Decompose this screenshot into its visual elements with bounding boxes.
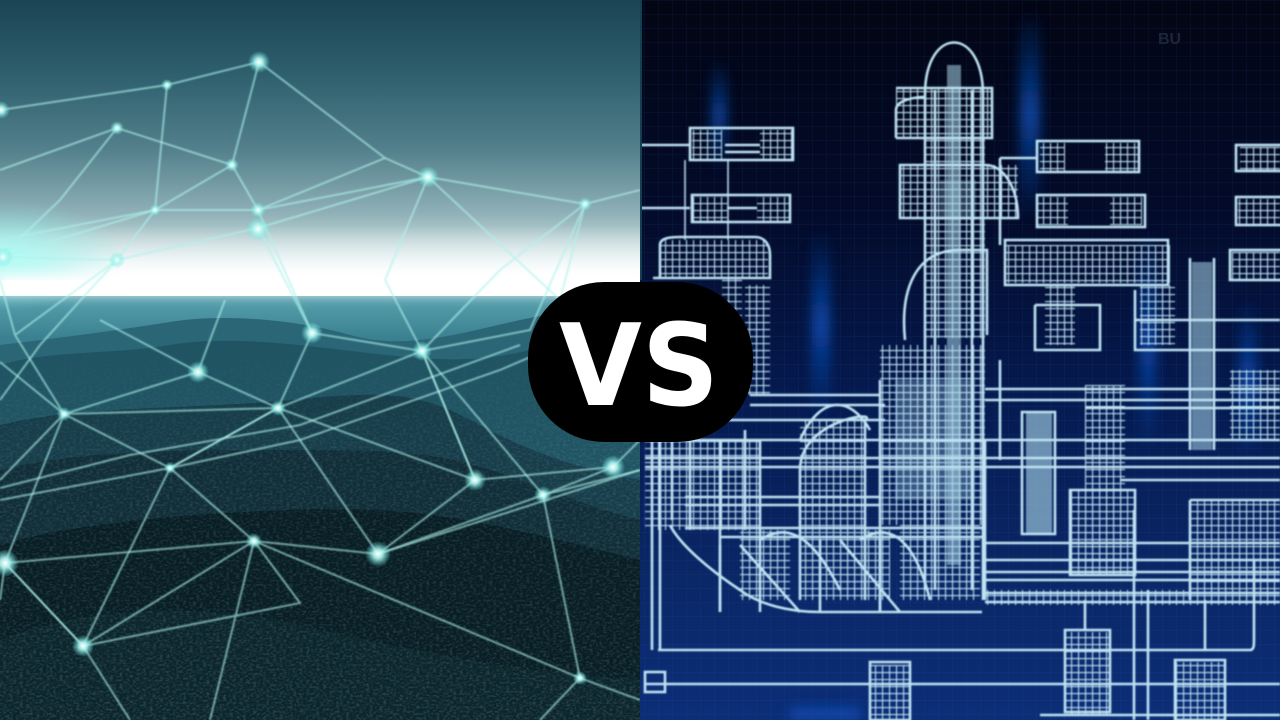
blue light beams	[712, 10, 1256, 720]
horizon glow	[30, 231, 640, 272]
blueprint drawing	[640, 42, 1280, 720]
blueprint background	[640, 0, 1280, 720]
header mark: BU	[1158, 31, 1181, 48]
panel: engineering blueprint	[640, 0, 1280, 720]
terrain texture	[0, 391, 640, 720]
network lines	[0, 62, 640, 720]
horizon blur	[0, 276, 640, 294]
dense mesh areas	[645, 88, 1280, 720]
network nodes	[0, 51, 625, 685]
VS badge	[528, 282, 753, 442]
left edge line	[640, 0, 642, 280]
badge background	[528, 282, 753, 442]
rolling hills	[0, 313, 640, 720]
pipework lines	[640, 42, 1280, 720]
panel: digital network landscape	[0, 0, 640, 720]
terrain background	[0, 296, 560, 345]
blueprint grid	[640, 0, 1280, 720]
cyan flare	[0, 208, 112, 304]
solid bright vessels	[895, 65, 1212, 565]
sky background	[0, 0, 640, 296]
VS label: VS	[559, 300, 719, 432]
horizon highlight	[0, 280, 60, 295]
